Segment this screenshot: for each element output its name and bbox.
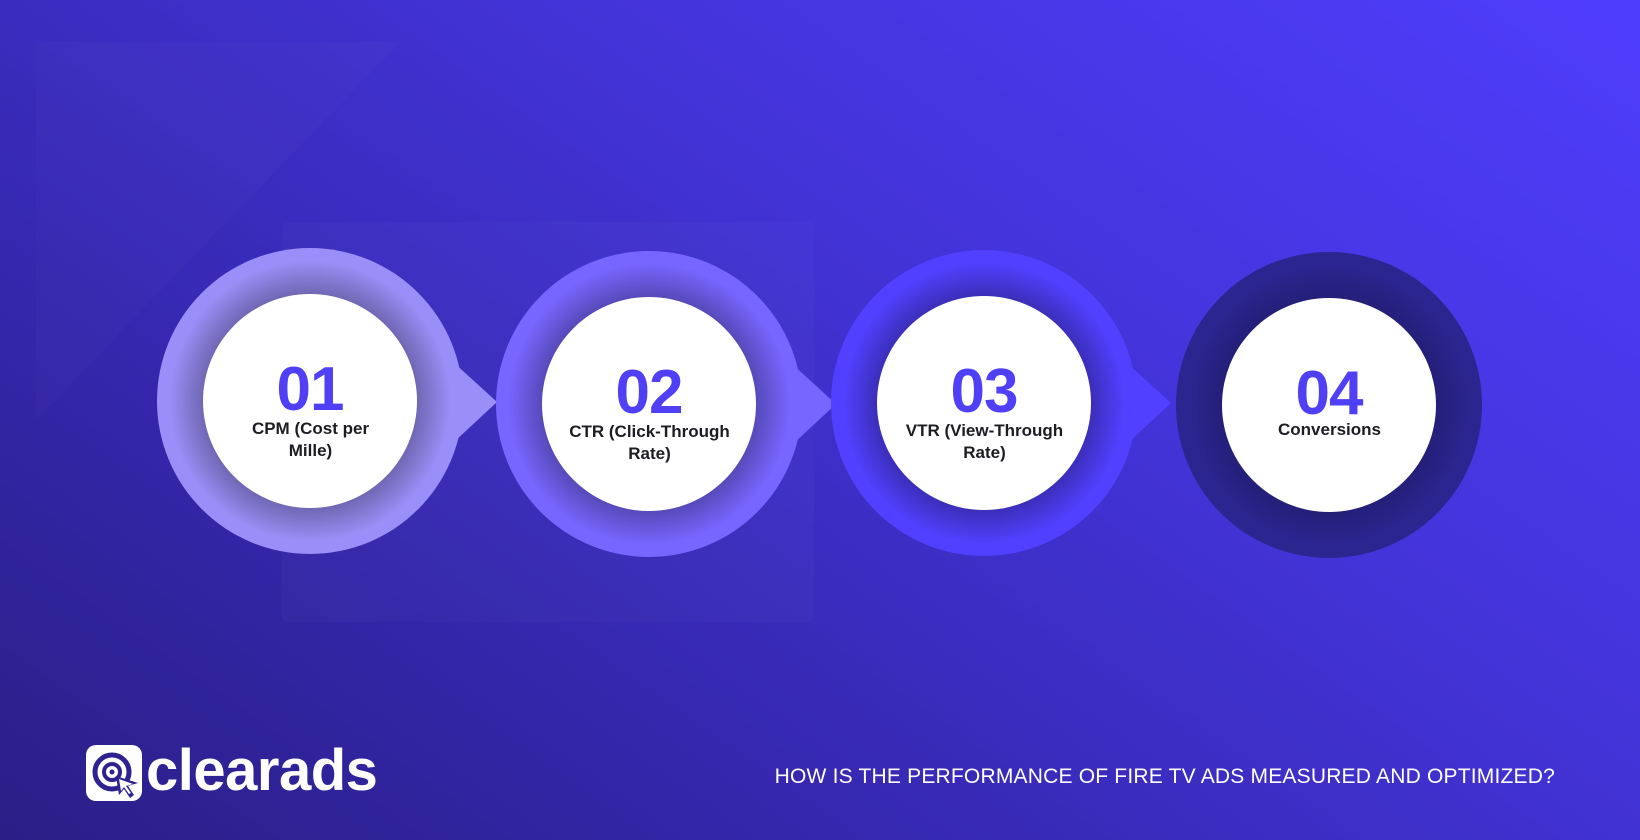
step 1: 01: [277, 355, 343, 424]
step 3: [877, 296, 1091, 510]
step 1: [203, 294, 417, 508]
step 3 ring: [831, 250, 1171, 556]
wordmark: clearads: [146, 738, 377, 803]
label 1: CPM (Cost per: [252, 419, 369, 438]
step 1 ring: [157, 248, 497, 554]
label 2: CTR (Click-Through: [569, 422, 730, 441]
label 3: [906, 421, 1063, 462]
step 4: [1222, 298, 1436, 512]
footer title: HOW IS THE PERFORMANCE OF FIRE TV ADS MEASURED AND OPTIMIZED?: [775, 765, 1555, 788]
logo: [86, 738, 377, 803]
label 4: Conversions: [1278, 420, 1381, 439]
step 2 ring: [496, 251, 836, 557]
step 4 ring: [1176, 252, 1482, 558]
step 2: [542, 297, 756, 511]
label 1: [252, 419, 369, 460]
label 3: VTR (View-Through: [906, 421, 1063, 440]
label 2: [569, 422, 730, 463]
step 4: 04: [1296, 359, 1362, 428]
label 2: Rate): [628, 444, 671, 463]
step 2: 02: [616, 358, 682, 427]
icon: target cursor: [86, 745, 142, 801]
label 3: Rate): [963, 443, 1006, 462]
label 1: Mille): [289, 441, 332, 460]
step 3: 03: [951, 357, 1017, 426]
